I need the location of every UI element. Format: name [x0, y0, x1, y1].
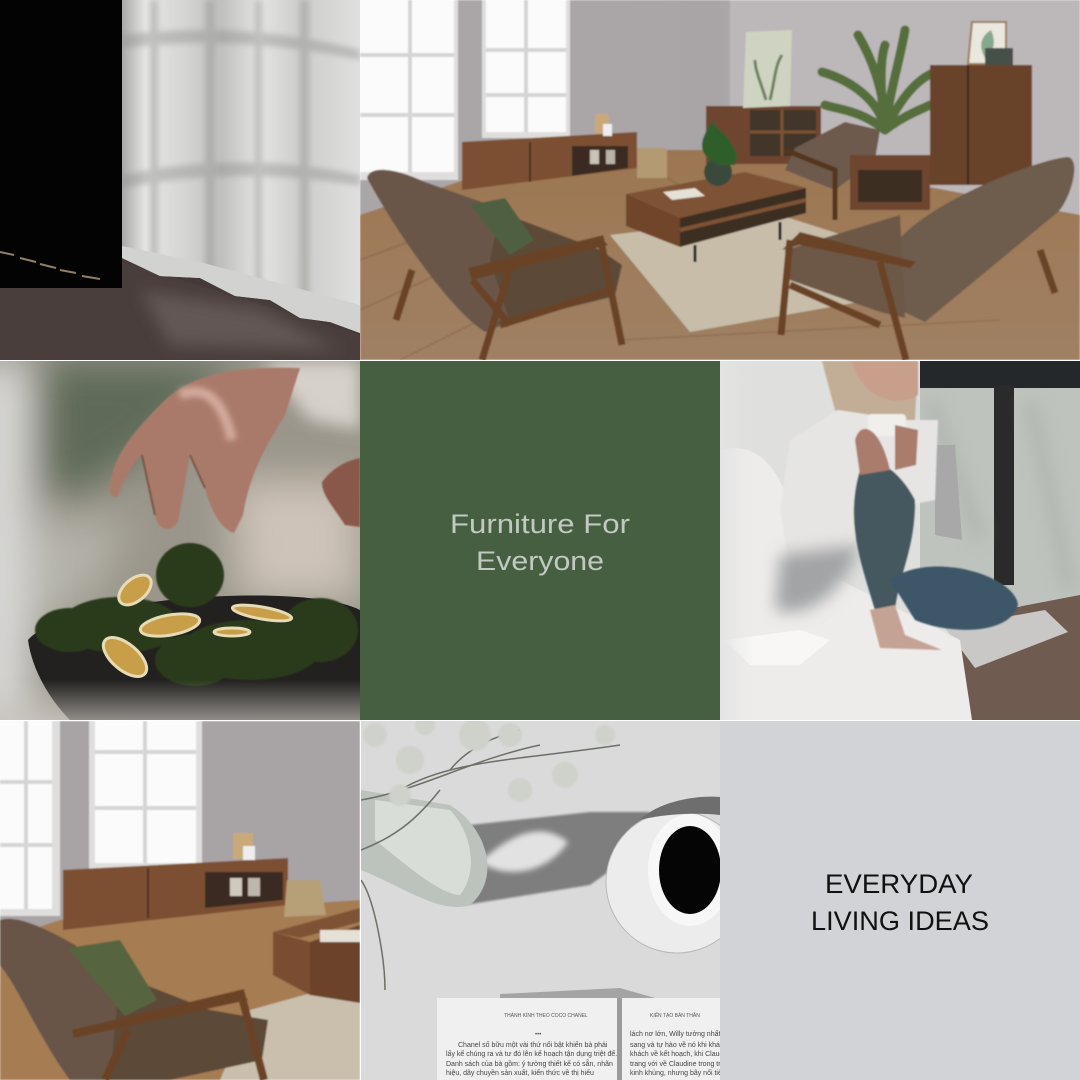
carpet — [138, 284, 334, 358]
open book: kinh khủng, nhưng bây nổi tiếng — [630, 1068, 730, 1077]
photo: hand and food — [0, 361, 360, 720]
sofa left — [367, 170, 622, 360]
open book: THÀNH KÍNH THEO COCO CHANEL — [504, 1012, 588, 1019]
coffee table — [273, 908, 360, 1003]
photo: living room — [360, 0, 1080, 360]
greens — [35, 543, 358, 686]
photo: woman with cup — [720, 361, 1080, 720]
windows — [360, 0, 570, 180]
open book: hiệu, dây chuyền sản xuất, kiến thức về thị hiếu — [446, 1068, 594, 1077]
table shadow — [465, 812, 650, 905]
black blackout curtain — [0, 0, 122, 288]
open book: lách nơ lớn, Willy tưởng nhất có — [630, 1029, 730, 1038]
heading: everyday living ideas: LIVING IDEAS — [811, 906, 989, 936]
woman — [775, 361, 1018, 650]
floor — [360, 150, 1080, 360]
armchair — [0, 919, 268, 1080]
sideboard, plant and decor — [706, 22, 1032, 185]
pan — [28, 596, 360, 720]
tv console — [462, 114, 667, 190]
coffee table — [626, 122, 806, 262]
hand — [110, 368, 360, 533]
windows — [0, 721, 202, 916]
open book: ••• — [535, 1032, 541, 1038]
photo: curtains — [0, 0, 360, 360]
photo: flowers, coffee and book — [361, 715, 748, 1080]
photo: room detail — [0, 721, 360, 1080]
open book: Danh sách của bà gồm: ý tưởng thiết kế có sẵn, nhãn — [446, 1059, 613, 1068]
sofa and blanket — [720, 445, 1080, 720]
open book: lấy kế chúng ra và tư đó lên kế hoạch tận dụng triệt để. — [446, 1049, 617, 1058]
lemon slices — [102, 574, 294, 678]
open book: KIẾN TẠO BẢN THÂN — [650, 1012, 700, 1019]
heading: everyday living ideas: EVERYDAY — [825, 869, 973, 899]
heading: everyday living ideas — [811, 869, 989, 936]
window — [920, 361, 1080, 606]
heading: furniture for everyone: Furniture For — [450, 509, 630, 539]
rug — [220, 985, 360, 1080]
rug — [610, 216, 854, 333]
sofa right — [781, 157, 1074, 360]
armchair in background — [785, 122, 930, 220]
glass vase — [361, 790, 487, 907]
baby's breath flowers — [361, 715, 620, 990]
white sheer curtain — [122, 0, 360, 340]
open book: Chanel số bữu một vài thứ nổi bật khiến bà phải — [458, 1040, 608, 1049]
open book: khách về kết hoạch, khi Claudine — [630, 1049, 733, 1058]
open book — [437, 988, 733, 1080]
heading: furniture for everyone — [450, 509, 630, 576]
heading: furniture for everyone: Everyone — [476, 546, 604, 576]
floor — [0, 900, 360, 1080]
open book: trang với về Claudine trong trang — [630, 1059, 732, 1068]
panel: green title — [360, 361, 720, 720]
tv console — [63, 833, 326, 930]
lighter right wall — [730, 0, 1080, 215]
open book: sang và tự hào về nó khi khác. — [630, 1040, 725, 1049]
panel: grey tagline — [720, 721, 1080, 1080]
coffee cup and saucer — [606, 796, 720, 954]
